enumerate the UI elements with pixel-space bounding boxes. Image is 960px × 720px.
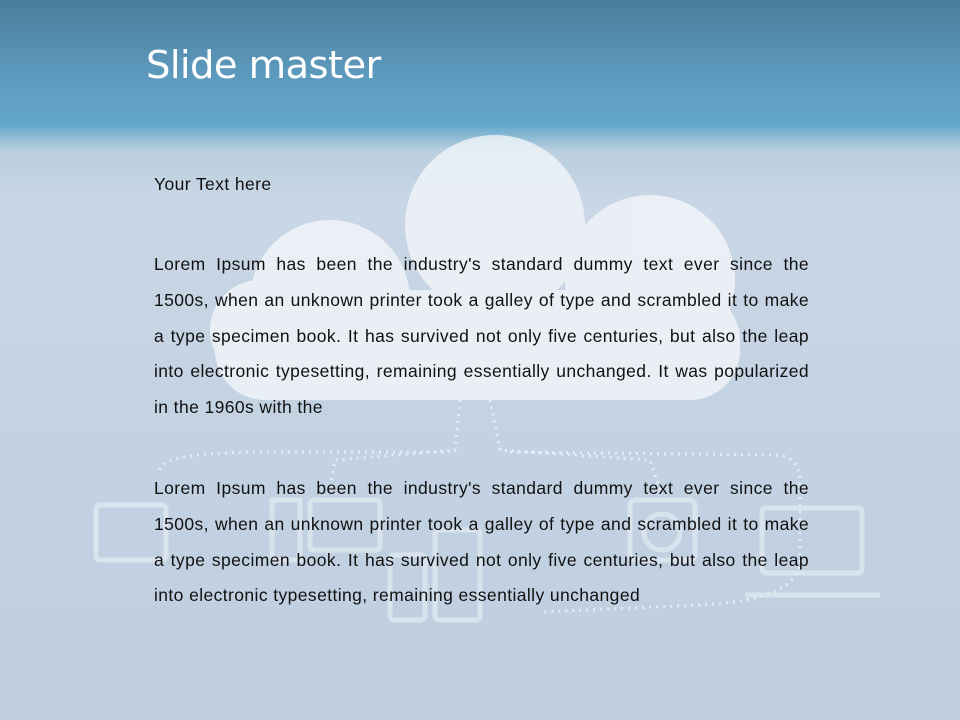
paragraph 2: into electronic typesetting, remaining essentially unchanged	[154, 585, 640, 605]
paragraph 2: 1500s, when an unknown printer took a galley of type and scrambled it to make	[154, 514, 809, 534]
subheading: Your Text here	[154, 174, 272, 194]
paragraph 1: a type specimen book. It has survived not only five centuries, but also the leap	[154, 326, 809, 346]
paragraph 2: a type specimen book. It has survived not only five centuries, but also the leap	[154, 550, 809, 570]
title: Slide master	[146, 43, 381, 88]
paragraph 1: in the 1960s with the	[154, 397, 323, 417]
paragraph 2: Lorem Ipsum has been the industry's standard dummy text ever since the	[154, 478, 809, 498]
paragraph 1: into electronic typesetting, remaining essentially unchanged. It was popularized	[154, 361, 809, 381]
paragraph 2	[154, 478, 809, 605]
paragraph 1	[154, 254, 809, 417]
paragraph 1: Lorem Ipsum has been the industry's standard dummy text ever since the	[154, 254, 809, 274]
paragraph 1: 1500s, when an unknown printer took a galley of type and scrambled it to make	[154, 290, 809, 310]
